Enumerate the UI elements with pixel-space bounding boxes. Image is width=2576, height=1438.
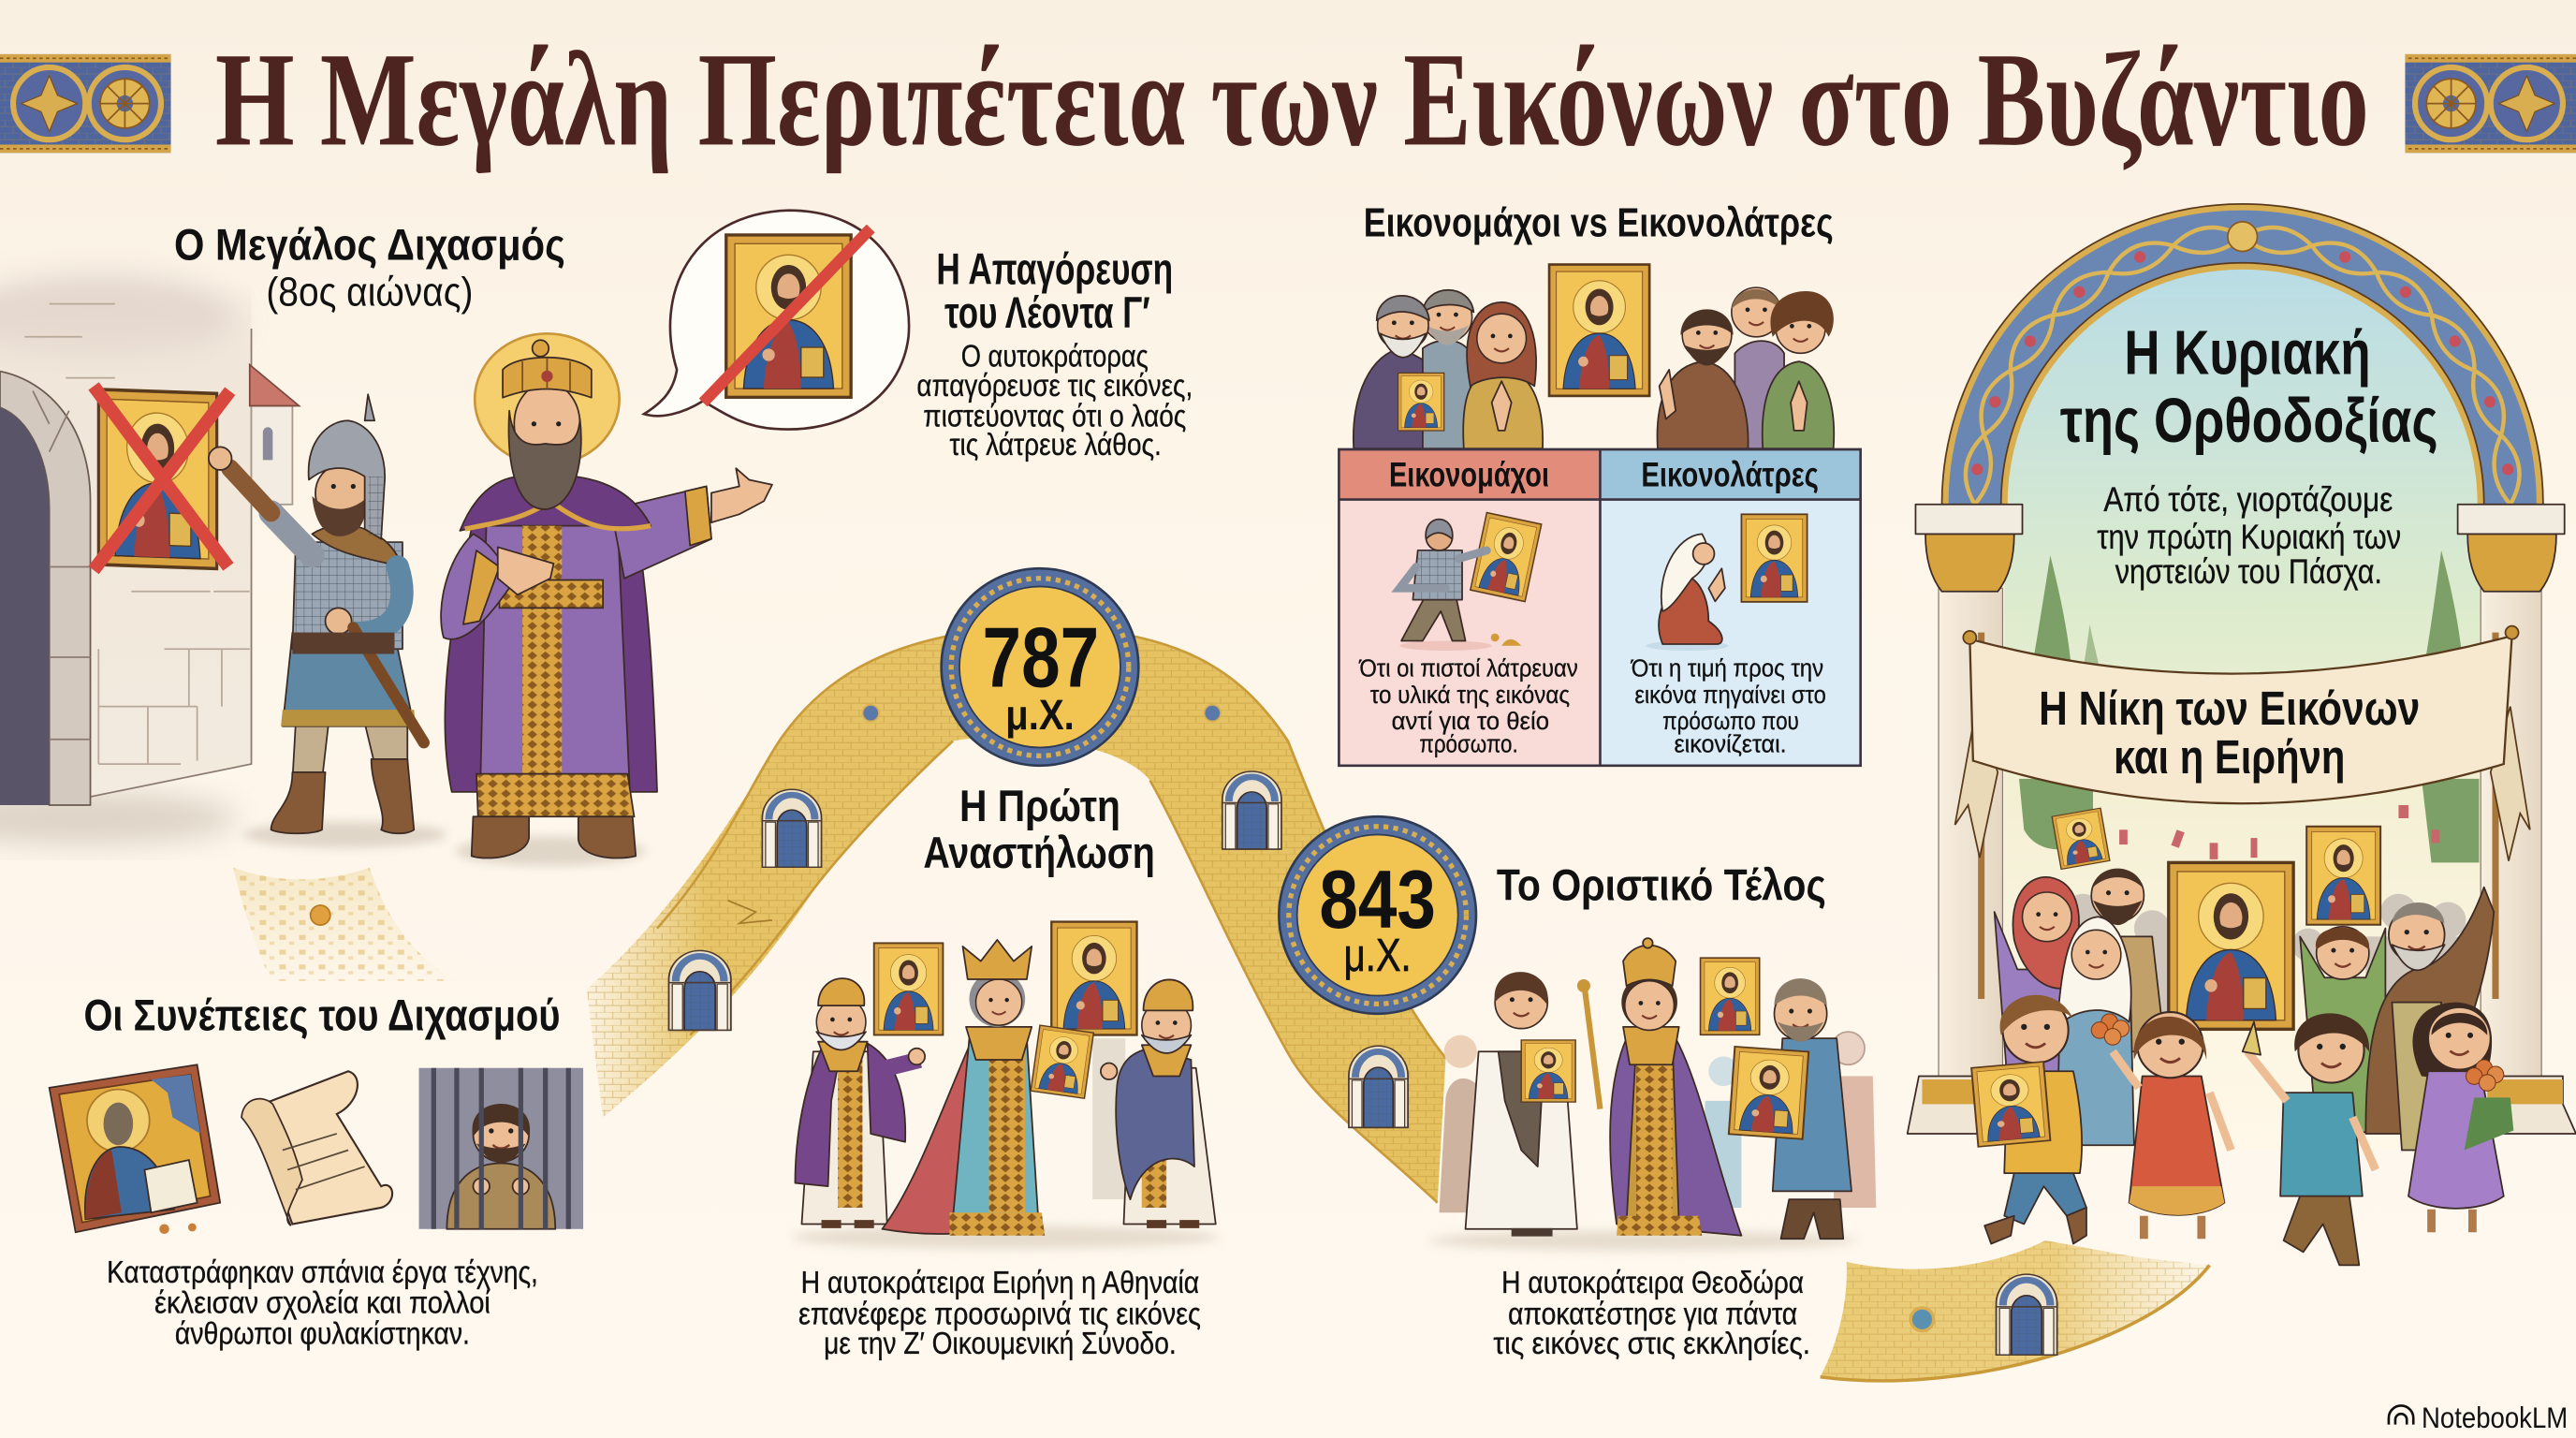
text block: Η Απαγόρευση του Λέοντα Γ: τις λάτρευε λάθος.	[949, 428, 1162, 462]
heading: Ο Μεγάλος Διχασμός	[174, 220, 565, 315]
badge: 787 μ.Χ.: 787	[983, 610, 1099, 706]
panel: Εικονολάτρες: Ότι η τιμή προς την	[1631, 654, 1823, 682]
trees	[2019, 550, 2479, 862]
panel: Εικονομάχοι: το υλικά της εικόνας	[1370, 681, 1570, 709]
big icon of Christ	[2169, 862, 2293, 1029]
poles	[1982, 633, 2496, 999]
girl in purple dress	[2408, 1003, 2513, 1232]
heading: Εικονομάχοι vs Εικονολάτρες: Εικονομάχοι vs Εικονολάτρες	[1364, 200, 1834, 246]
badge: 843 μ.Χ.: μ.Χ.	[1344, 931, 1412, 981]
arch band	[1942, 204, 2543, 505]
bearded man	[2086, 869, 2165, 1051]
text block: Η Απαγόρευση του Λέοντα Γ: πιστεύοντας ότι ο λαός	[923, 399, 1186, 433]
panel: Εικονολάτρες	[1600, 449, 1861, 766]
icon: church window 2	[762, 789, 822, 867]
man with icon	[1729, 978, 1852, 1239]
golden mosaic road	[587, 624, 1445, 1203]
banner: Η Νίκη των Εικόνων: και η Ειρήνη	[2114, 730, 2345, 784]
icon: church window 4	[1349, 1046, 1408, 1127]
illustration: Irene and bishops	[792, 922, 1219, 1249]
heading: Ο Μεγάλος Διχασμός: Ο Μεγάλος Διχασμός	[174, 220, 565, 270]
decorative band: right	[2405, 54, 2576, 153]
text block: consequences: άνθρωποι φυλακίστηκαν.	[175, 1317, 470, 1352]
right column	[2458, 505, 2576, 1134]
crossed out icon	[94, 386, 230, 570]
icon: damaged mosaic icon	[50, 1064, 220, 1234]
text block: Η Απαγόρευση του Λέοντα Γ: του Λέοντα Γ′	[944, 288, 1150, 338]
icon: prisoner behind bars	[419, 1068, 583, 1229]
banner: Η Νίκη των Εικόνων	[1955, 626, 2530, 861]
heading: Η Πρώτη Αναστήλωση: Αναστήλωση	[923, 829, 1155, 878]
text block: Irene	[798, 1266, 1201, 1361]
text block: Η Απαγόρευση του Λέοντα Γ: Ο αυτοκράτορας	[961, 339, 1149, 374]
banner: Η Νίκη των Εικόνων: Η Νίκη των Εικόνων	[2039, 682, 2420, 735]
text block: Η Κυριακή της Ορθοδοξίας: Από τότε, γιορτάζουμε	[2103, 480, 2393, 519]
heading: Το Οριστικό Τέλος: Το Οριστικό Τέλος	[1497, 861, 1826, 911]
text block: Theodora: τις εικόνες στις εκκλησίες.	[1493, 1327, 1810, 1361]
text block: Η Κυριακή της Ορθοδοξίας: την πρώτη Κυριακή των	[2097, 518, 2401, 556]
badge: 787 μ.Χ.	[942, 568, 1138, 766]
boy in teal tunic	[2243, 1013, 2376, 1265]
text block: Η Κυριακή της Ορθοδοξίας	[2060, 318, 2438, 591]
bishop left	[795, 978, 925, 1224]
badge: 787 μ.Χ.: μ.Χ.	[1005, 691, 1075, 739]
panel: Εικονολάτρες: Εικονολάτρες	[1641, 455, 1819, 493]
pale followers	[1439, 1032, 1876, 1212]
text block: consequences	[107, 1255, 538, 1352]
text block: Theodora	[1493, 1266, 1810, 1361]
text block: Theodora: αποκατέστησε για πάντα	[1508, 1298, 1797, 1332]
raised small icon	[2306, 827, 2380, 925]
illustration: Theodora and followers	[1429, 938, 1876, 1251]
woman in red scarf	[1995, 877, 2079, 1084]
confetti	[2119, 805, 2439, 859]
icon: church window 3	[1222, 771, 1281, 849]
text block: consequences: Καταστράφηκαν σπάνια έργα τέχνης,	[107, 1255, 538, 1290]
text block: Η Κυριακή της Ορθοδοξίας: νηστειών του Πάσχα.	[2115, 552, 2382, 591]
woman in white veil	[2056, 917, 2134, 1145]
tower with roof	[250, 365, 299, 505]
heading: Ο Μεγάλος Διχασμός: (8ος αιώνας)	[266, 269, 473, 315]
figure: soldier	[209, 394, 446, 848]
icon: soldier smashing icon	[1399, 513, 1542, 651]
person in white	[1466, 972, 1577, 1232]
faded road fragment	[233, 868, 457, 981]
Theodora	[1577, 938, 1741, 1236]
panel: Εικονομάχοι: Εικονομάχοι	[1389, 455, 1549, 493]
crowd celebration	[1971, 633, 2513, 1265]
boy in green	[2300, 927, 2385, 1132]
text block: Η Απαγόρευση του Λέοντα Γ: απαγόρευσε τις εικόνες,	[916, 369, 1193, 404]
icon: church window 5	[1997, 1274, 2057, 1355]
heading: Η Πρώτη Αναστήλωση: Η Πρώτη	[959, 782, 1120, 831]
text block: Η Απαγόρευση του Λέοντα Γ	[916, 245, 1193, 462]
road end segment	[1821, 1240, 2210, 1381]
speech bubble: banned icon	[644, 211, 909, 430]
heading: Η Πρώτη Αναστήλωση	[923, 782, 1155, 878]
icon: kneeling woman and icon	[1647, 514, 1808, 651]
text block: consequences: έκλεισαν σχολεία και πολλοί	[154, 1285, 490, 1320]
panel: Εικονομάχοι	[1339, 449, 1600, 766]
text block: Irene: Η αυτοκράτειρα Ειρήνη η Αθηναία	[801, 1266, 1199, 1300]
icon: scroll	[242, 1071, 392, 1225]
heading: Οι Συνέπειες του Διχασμού: Οι Συνέπειες του Διχασμού	[84, 990, 560, 1040]
stone arch doorway	[0, 372, 91, 805]
panel: Εικονομάχοι: αντί για το θείο	[1392, 707, 1549, 735]
illustration: worshippers and icon	[1354, 265, 1834, 448]
boy with icon	[1971, 995, 2086, 1244]
old man in brown cloak	[2365, 888, 2494, 1151]
panel: Εικονομάχοι: Ότι οι πιστοί λάτρευαν	[1358, 654, 1578, 682]
text block: Η Κυριακή της Ορθοδοξίας: της Ορθοδοξίας	[2060, 387, 2438, 456]
comparison table	[1339, 449, 1861, 766]
panel: stone wall with icon	[0, 274, 299, 844]
icon: church window 1	[669, 950, 731, 1030]
text block: Η Απαγόρευση του Λέοντα Γ: Η Απαγόρευση	[936, 245, 1173, 295]
badge: 843 μ.Χ.	[1279, 816, 1476, 1014]
right group	[1657, 287, 1834, 448]
decorative band: left	[0, 54, 171, 153]
text block: Irene: με την Ζ′ Οικουμενική Σύνοδο.	[824, 1327, 1177, 1361]
left column	[1908, 505, 2023, 1134]
badge: 843 μ.Χ.: 843	[1319, 854, 1436, 946]
panel: Εικονολάτρες: πρόσωπο που	[1662, 707, 1799, 735]
panel: Εικονομάχοι: πρόσωπο.	[1419, 729, 1518, 757]
text block: Theodora: Η αυτοκράτειρα Θεοδώρα	[1501, 1266, 1804, 1300]
panel: Εικονολάτρες: εικονίζεται.	[1674, 729, 1787, 757]
girl in red dress	[2091, 1012, 2231, 1239]
Irene	[882, 940, 1093, 1236]
text block: Irene: επανέφερε προσωρινά τις εικόνες	[798, 1298, 1201, 1332]
figure: emperor with halo	[441, 333, 772, 866]
text block: Η Κυριακή της Ορθοδοξίας: Η Κυριακή	[2124, 318, 2371, 388]
bishop right	[1101, 979, 1216, 1224]
panel: arch of the Sunday of Orthodoxy	[1908, 204, 2576, 1151]
panel: Εικονολάτρες: εικόνα πηγαίνει στο	[1634, 681, 1826, 709]
tilted icon	[2052, 808, 2110, 869]
back crowd	[2063, 894, 2472, 1051]
left group	[1354, 290, 1543, 448]
